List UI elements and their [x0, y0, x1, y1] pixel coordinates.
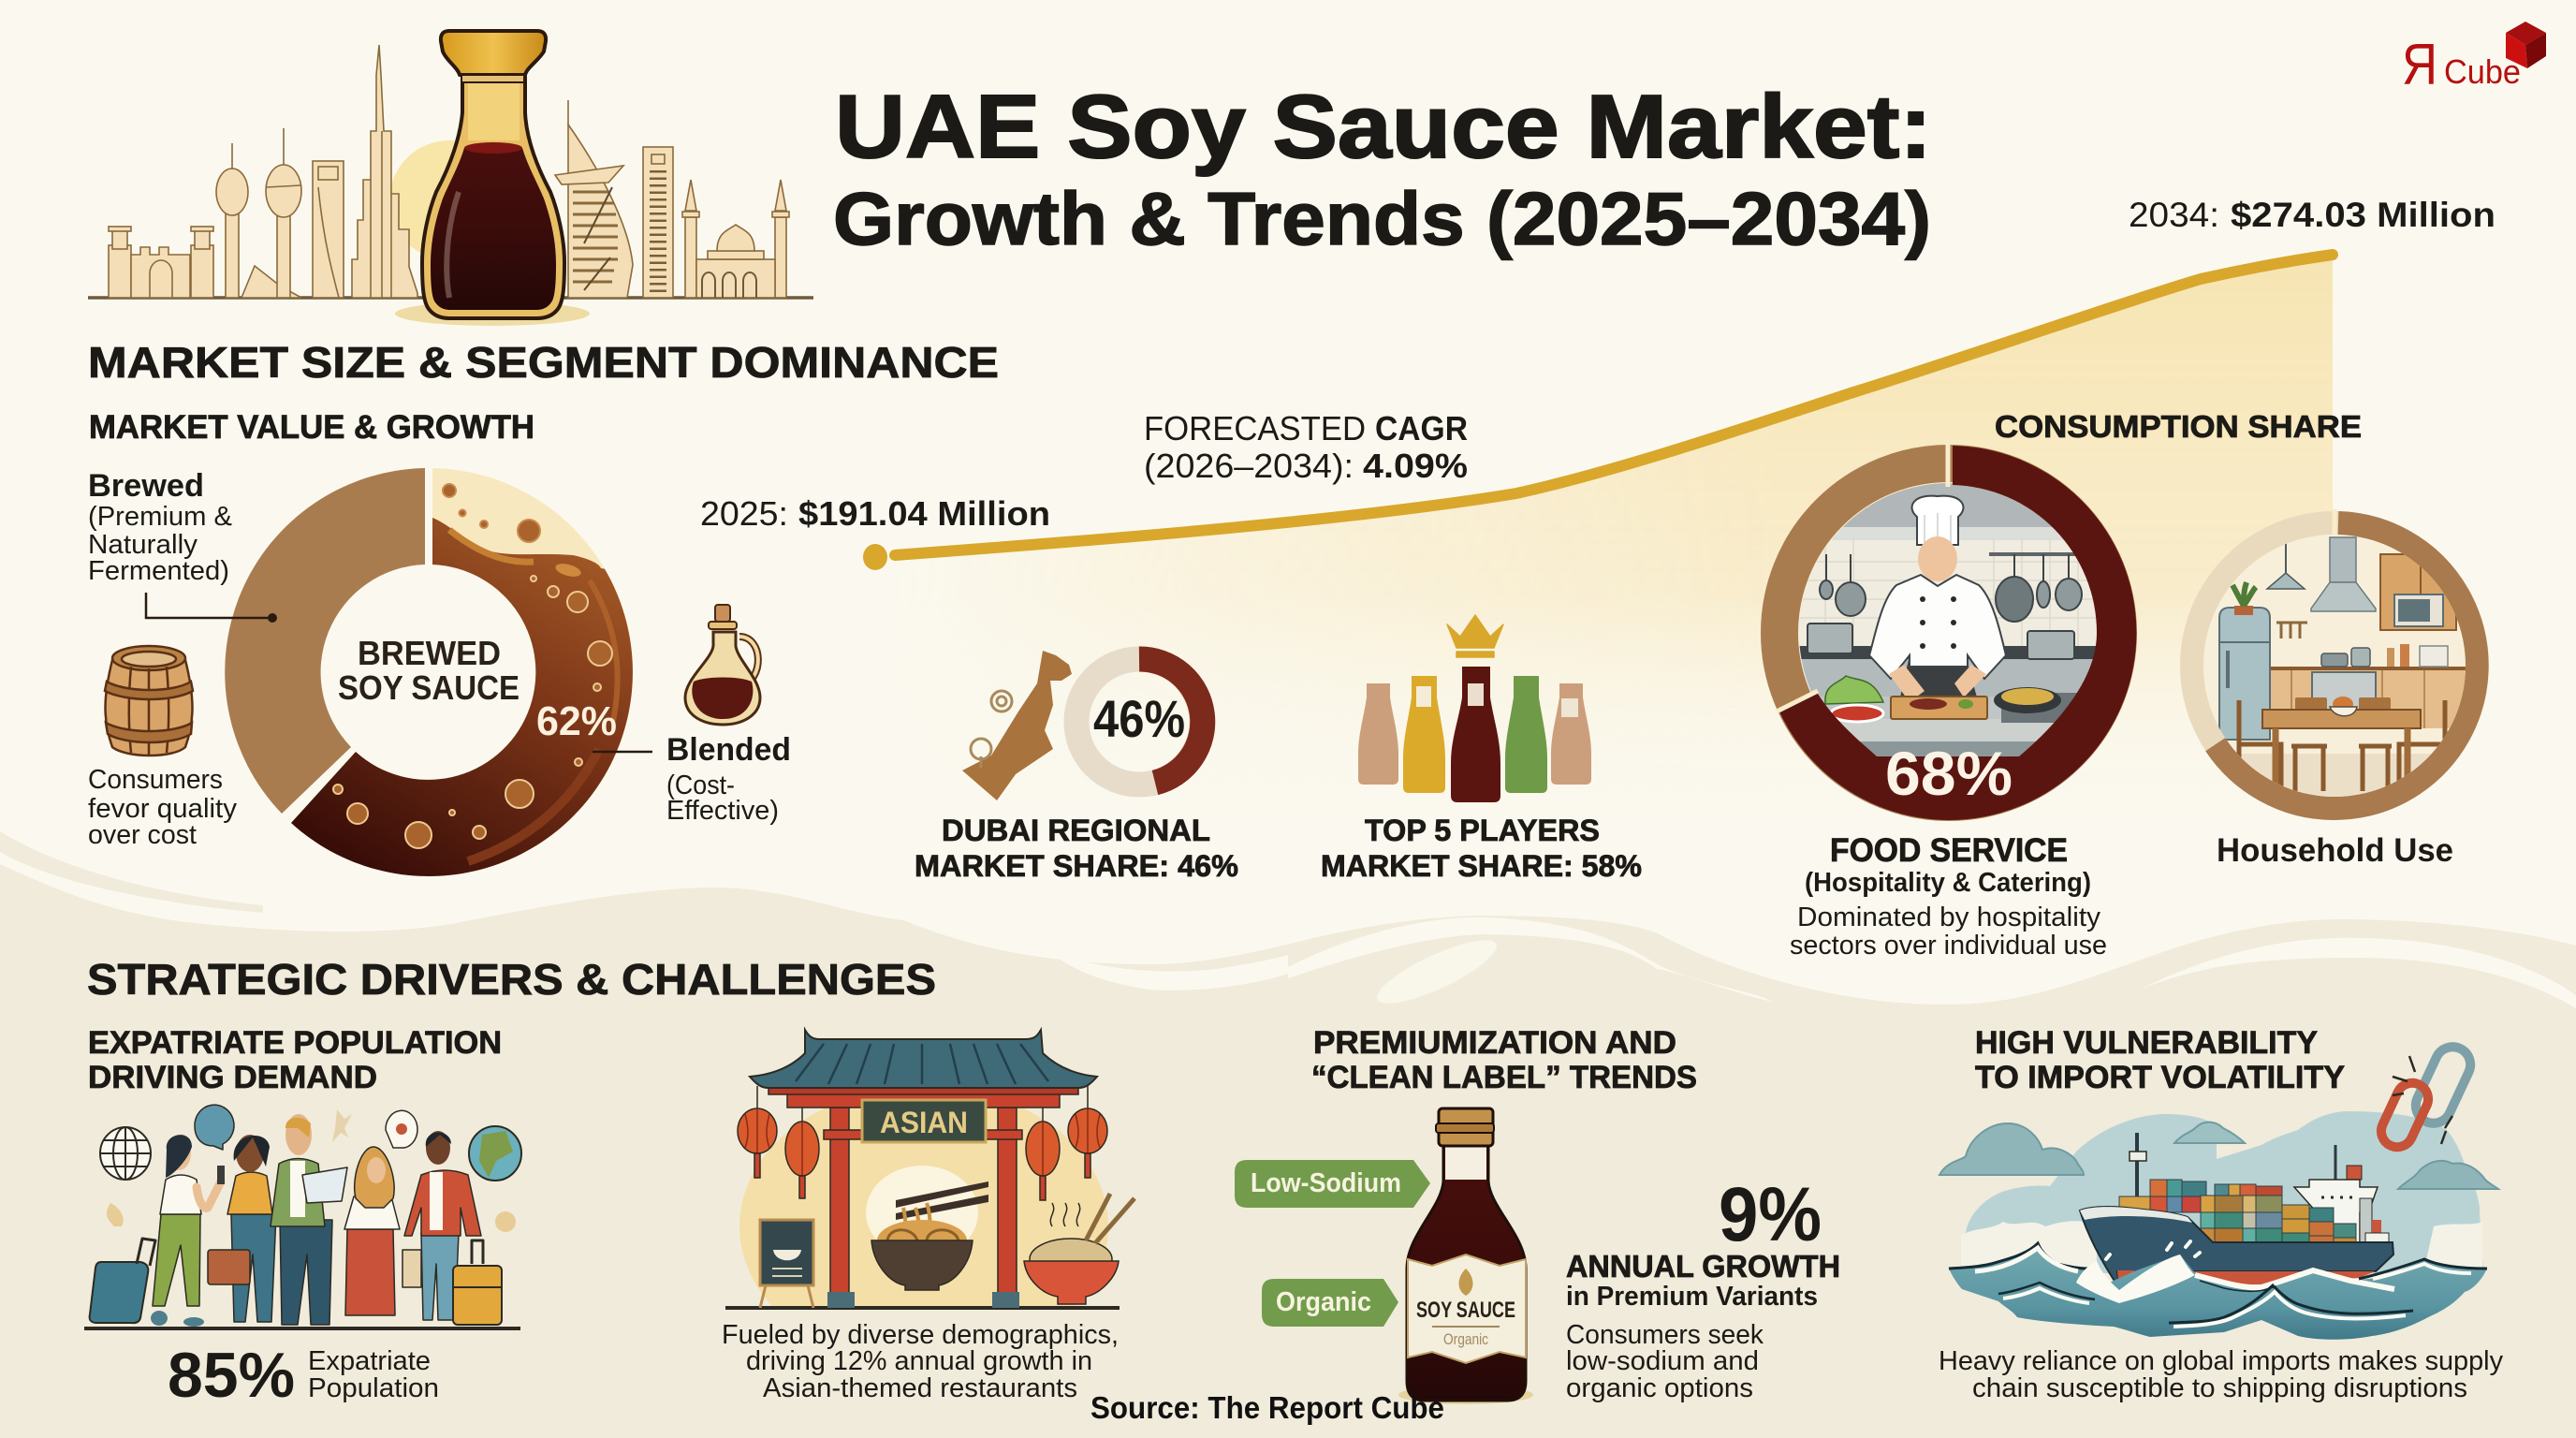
- text: annual growth: organic options: [1566, 1373, 1753, 1403]
- label: Dubai share: DUBAI REGIONAL: [942, 814, 1210, 847]
- label: brewed: Brewed: [88, 468, 204, 504]
- section heading: strategic drivers: STRATEGIC DRIVERS & CHALLENGES: [87, 955, 936, 1004]
- text: asian restaurants growth: [722, 1320, 1119, 1403]
- panel: expatriate population: [84, 1025, 521, 1411]
- donut: 46 percent: 46%: [1093, 689, 1185, 748]
- label: brewed: Fermented): [88, 556, 229, 586]
- label: forecasted CAGR: (2026–2034):: [1144, 447, 1354, 485]
- label: 2025 value: $191.04 Million: [798, 494, 1050, 533]
- icon: breaking chain: [2376, 1041, 2476, 1152]
- text: consumers favor quality: [88, 765, 238, 850]
- label: blended: (Cost-: [666, 770, 735, 800]
- soy sauce bottle: [422, 31, 564, 318]
- tag: organic: [1262, 1279, 1398, 1327]
- source note: Source: The Report Cube: [1090, 1390, 1444, 1425]
- label: blended: Effective): [666, 796, 779, 826]
- label: food service: (Hospitality & Catering): [1805, 868, 2091, 898]
- icon: oil jug: [685, 605, 760, 725]
- label: food service: Dominated by hospitality: [1797, 902, 2101, 932]
- suitcase left: [90, 1239, 155, 1323]
- text: import reliance: [1939, 1346, 2503, 1403]
- section heading: market size: MARKET SIZE & SEGMENT DOMINANCE: [88, 338, 999, 387]
- label: top 5 share: TOP 5 PLAYERS: [1365, 814, 1600, 847]
- label: expatriate population: Population: [308, 1373, 439, 1403]
- label: forecasted CAGR: FORECASTED: [1144, 409, 1366, 448]
- illustration: asian gate with noodles: [725, 1026, 1136, 1310]
- label: blended: [666, 732, 791, 826]
- leader line: brewed: [146, 593, 277, 623]
- tag: low sodium: [1235, 1160, 1430, 1208]
- illustration: group of travellers: [84, 1105, 521, 1328]
- label: 2025 value: [700, 494, 1050, 533]
- label: forecasted CAGR: 4.09%: [1363, 447, 1468, 485]
- label: household use: Household Use: [2217, 832, 2453, 869]
- illustration: premium soy sauce bottle: Organic: [1443, 1330, 1488, 1348]
- donut chart: brewed vs blended: [225, 468, 633, 876]
- text: consumers favor quality: over cost: [88, 820, 197, 850]
- icon: Dubai map: [962, 651, 1072, 800]
- text: asian restaurants growth: Asian-themed restaurants: [763, 1373, 1077, 1403]
- illustration: UAE skyline with soy sauce bottle: [88, 31, 813, 326]
- label: food service: [1790, 832, 2107, 961]
- heading: premiumization: PREMIUMIZATION AND: [1313, 1025, 1676, 1061]
- donut center label: SOY SAUCE: [338, 668, 520, 707]
- ring chart: food service kitchen: [1777, 445, 2136, 820]
- icon: five bottles: [1358, 667, 1591, 802]
- label: brewed: (Premium &: [88, 502, 232, 532]
- illustration: cargo ship on waves: [1939, 1111, 2498, 1340]
- text: annual growth: ANNUAL GROWTH: [1566, 1249, 1840, 1284]
- sign text: ASIAN: [880, 1106, 968, 1139]
- donut percentage: 62%: [536, 698, 617, 744]
- title: UAE Soy Sauce Market:: [835, 77, 1932, 177]
- heading: consumption share: CONSUMPTION SHARE: [1995, 409, 2362, 444]
- label: 2034 value: $274.03 Million: [2231, 196, 2496, 234]
- donut: 46 percent: [1076, 659, 1203, 785]
- label: expatriate population: Expatriate: [308, 1346, 431, 1376]
- label: brewed: [88, 468, 232, 586]
- stat: Dubai regional market share: [915, 651, 1238, 883]
- label: food service: sectors over individual use: [1790, 931, 2107, 961]
- title: [833, 77, 1932, 260]
- title: Growth & Trends (2025–2034): [833, 177, 1931, 260]
- tag: low sodium: Low-Sodium: [1251, 1168, 1401, 1198]
- growth line chart: [863, 255, 2333, 570]
- subheading: market value and growth: MARKET VALUE & GROWTH: [89, 409, 534, 446]
- illustration: premium soy sauce bottle: [1398, 1108, 1533, 1404]
- panel: import volatility: [1939, 1025, 2503, 1403]
- label: 2025 value: 2025:: [700, 494, 788, 533]
- heading: import volatility: TO IMPORT VOLATILITY: [1975, 1060, 2345, 1095]
- heading: import volatility: HIGH VULNERABILITY: [1975, 1025, 2318, 1061]
- text: annual growth: low-sodium and: [1566, 1346, 1759, 1376]
- heading: import volatility: [1975, 1025, 2345, 1095]
- heading: expatriate population: EXPATRIATE POPULATION: [88, 1025, 502, 1061]
- logo: RCube: Я: [2402, 33, 2437, 97]
- label: expatriate population: [308, 1346, 439, 1403]
- label: Dubai share: MARKET SHARE: 46%: [915, 849, 1238, 883]
- illustration: home kitchen: [2200, 534, 2471, 805]
- label: 2034 value: 2034:: [2129, 196, 2219, 234]
- text: consumers favor quality: Consumers: [88, 765, 223, 795]
- icon: crown: [1447, 615, 1503, 657]
- heading: premiumization: [1311, 1025, 1697, 1095]
- stat: 9 percent: 9%: [1719, 1172, 1822, 1257]
- text: annual growth: in Premium Variants: [1566, 1282, 1818, 1312]
- lower section wave background: [0, 831, 2576, 1438]
- logo: RCube: Cube: [2444, 52, 2521, 91]
- label: top 5 share: [1321, 814, 1642, 883]
- heading: expatriate population: DRIVING DEMAND: [88, 1060, 377, 1095]
- text: annual growth: Consumers seek: [1566, 1320, 1764, 1350]
- text: import reliance: Heavy reliance on global imports makes supply: [1939, 1346, 2503, 1376]
- percentage: 68: 68%: [1885, 739, 2012, 808]
- text: annual growth: [1566, 1249, 1840, 1403]
- illustration: chef in kitchen: [1799, 483, 2097, 756]
- panel: asian restaurants: [722, 1030, 1134, 1403]
- tag: organic: Organic: [1276, 1287, 1371, 1317]
- panel: premiumization and clean label: [1235, 1025, 1840, 1404]
- text: asian restaurants growth: Fueled by diverse demographics,: [722, 1320, 1119, 1350]
- label: blended: Blended: [666, 732, 791, 768]
- growth area fill: [1022, 260, 2333, 719]
- ring chart: household kitchen: [2192, 509, 2477, 808]
- label: top 5 share: MARKET SHARE: 58%: [1321, 849, 1642, 883]
- text: import reliance: chain susceptible to shipping disruptions: [1972, 1373, 2467, 1403]
- icon: barrel: [105, 646, 193, 756]
- text: consumers favor quality: fevor quality: [88, 794, 238, 824]
- illustration: premium soy sauce bottle: SOY SAUCE: [1416, 1298, 1515, 1323]
- label: food service: FOOD SERVICE: [1830, 832, 2068, 869]
- label: forecasted CAGR: [1144, 409, 1468, 485]
- label: brewed: Naturally: [88, 530, 198, 560]
- label: 2034 value: [2129, 196, 2496, 234]
- donut center label: BREWED: [358, 634, 501, 672]
- heading: expatriate population: [88, 1025, 502, 1095]
- stat: top 5 players market share: [1321, 615, 1642, 883]
- stat: 85 percent: 85%: [168, 1340, 295, 1411]
- label: forecasted CAGR: CAGR: [1375, 409, 1468, 448]
- label: Dubai share: [915, 814, 1238, 883]
- leader line: blended: [593, 751, 652, 753]
- logo: RCube: [2402, 22, 2546, 97]
- text: asian restaurants growth: driving 12% annual growth in: [746, 1346, 1092, 1376]
- heading: premiumization: “CLEAN LABEL” TRENDS: [1311, 1060, 1697, 1095]
- donut center label: [338, 634, 520, 707]
